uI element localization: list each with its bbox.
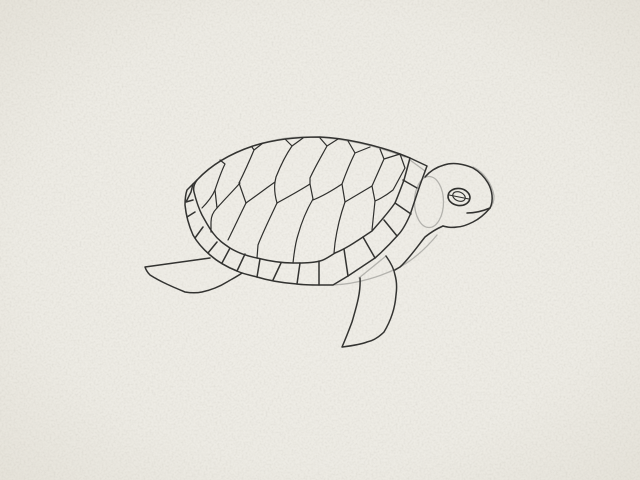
central and costal scutes [202,138,405,263]
light construction lines [197,137,494,285]
shell outline [185,137,427,285]
front flipper [342,256,397,347]
marginal scute dividers [186,180,417,285]
mouth [467,208,490,213]
icon: eye [447,187,471,207]
head and neck [395,164,492,270]
turtle illustration [145,137,494,347]
inner shell edge [194,158,410,263]
neck underside [395,226,443,270]
rear flipper [145,258,242,293]
